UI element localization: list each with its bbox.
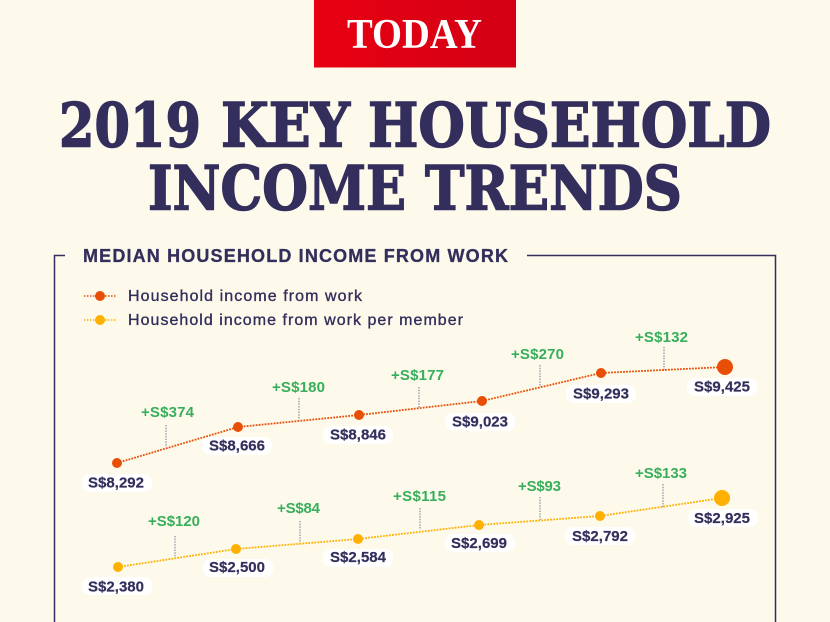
data points (112, 359, 733, 468)
change tick marks (166, 347, 664, 447)
value labels: S$8,846 (330, 426, 386, 444)
value labels: S$9,023 (452, 414, 508, 430)
title (59, 90, 771, 224)
change tick marks (175, 484, 663, 558)
value label pills (82, 378, 757, 492)
value labels: S$2,699 (451, 535, 507, 552)
value labels: S$2,584 (330, 549, 387, 566)
value labels: S$9,293 (573, 386, 629, 402)
value labels: S$2,792 (572, 528, 628, 545)
dotted trend line (118, 498, 722, 567)
change labels (141, 329, 688, 421)
value labels (88, 510, 750, 596)
legend (84, 288, 464, 329)
title: 2019 (59, 90, 201, 162)
title: HOUSEHOLD (368, 90, 771, 162)
change labels: +S$133 (635, 465, 687, 482)
value labels: S$9,425 (694, 378, 750, 396)
change labels: +S$177 (391, 367, 444, 384)
panel: median household income frame (54, 256, 776, 622)
change labels: +S$120 (148, 513, 200, 530)
logo: TODAY: TODAY (347, 12, 482, 58)
title: INCOME (148, 154, 406, 224)
title: KEY (221, 90, 351, 162)
change labels (148, 465, 687, 530)
change labels: +S$115 (393, 488, 446, 505)
value labels: S$2,925 (694, 510, 750, 527)
chart: household income from work (82, 329, 757, 492)
chart: household income from work per member (82, 465, 758, 596)
legend: household income from work: Household income from work (128, 288, 363, 305)
change labels: +S$93 (518, 478, 561, 495)
change labels: +S$374 (141, 404, 195, 421)
change labels: +S$132 (635, 329, 688, 346)
value labels: S$2,500 (209, 559, 265, 576)
title: TRENDS (425, 154, 682, 224)
value labels: S$8,666 (209, 438, 265, 454)
value labels: S$2,380 (88, 578, 144, 596)
change labels: +S$84 (277, 500, 321, 517)
data points (113, 490, 730, 572)
value labels: S$8,292 (88, 474, 144, 492)
dotted trend line (117, 367, 725, 463)
change labels: +S$180 (272, 379, 325, 396)
logo: TODAY (314, 0, 516, 68)
change labels: +S$270 (511, 346, 564, 363)
legend: household income from work per member: Household income from work per member (128, 312, 464, 329)
value labels (88, 378, 750, 492)
value label pills (82, 509, 758, 595)
panel heading: MEDIAN HOUSEHOLD INCOME FROM WORK (83, 246, 508, 266)
